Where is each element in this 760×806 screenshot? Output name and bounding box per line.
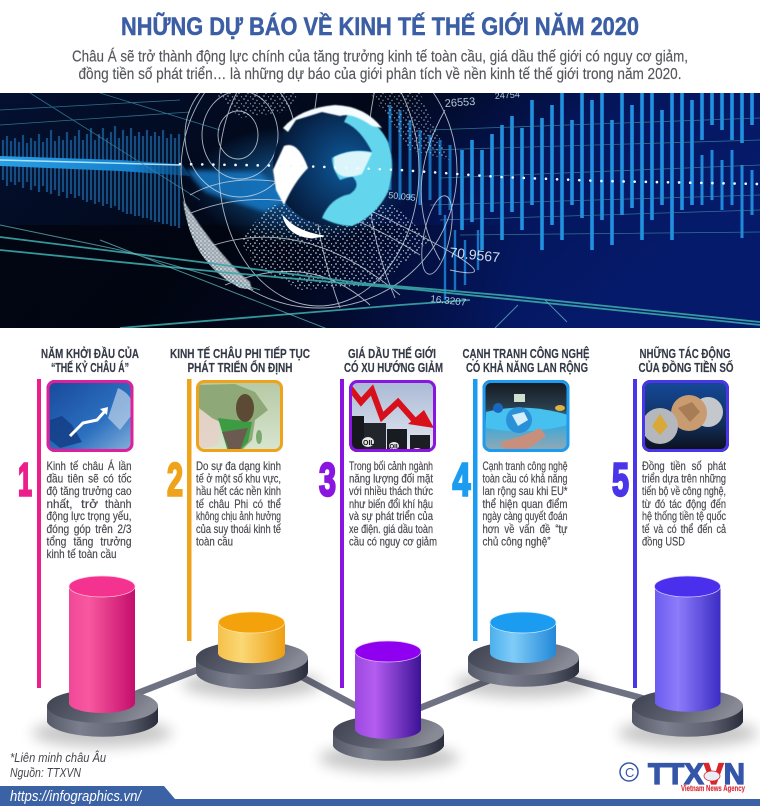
inner globe (273, 106, 393, 226)
body text 1: kinh tế toàn cầu (46, 547, 116, 561)
intro text: đồng tiền số phát triển… là những dự báo của giới phân tích về nền kinh tế thế giới trong năm 2020. (78, 66, 682, 83)
body text 2: Do sự đa dạng kinh (196, 459, 281, 473)
heading 1: “THẾ KỶ CHÂU Á” (51, 360, 129, 375)
hero image: digital globe and market data: 16.3207 (430, 294, 467, 309)
globe wireframe (180, 93, 475, 308)
body text 4: chủ công nghệ” (482, 534, 550, 548)
body text 3 (349, 459, 437, 548)
intro text (72, 48, 688, 83)
body text 3: xe điện. giá dầu toàn (349, 522, 433, 536)
heading 4 (462, 346, 590, 375)
logo: TTXVN: C (625, 765, 634, 780)
body text 5: hệ thống tiền tệ quốc (642, 509, 726, 523)
body text 5: triển dựa trên những (642, 472, 726, 486)
heading 1: NĂM KHỞI ĐẦU CỦA (41, 346, 139, 361)
title: NHỮNG DỰ BÁO VỀ KINH TẾ THẾ GIỚI NĂM 2020 (121, 11, 639, 41)
vertical rule 4 (473, 379, 478, 641)
number 3: 3 (319, 454, 336, 506)
body text 4: lan rộng sau khi EU* (482, 484, 568, 498)
body text 5: tiến bộ về công nghệ, (642, 484, 726, 498)
heading 4: CẠNH TRANH CÔNG NGHỆ (462, 346, 590, 361)
body text 5: đồng USD (642, 534, 685, 548)
column 3: oil (319, 346, 443, 688)
body text 1: Kinh tế châu Á lần (46, 458, 132, 473)
vertical rule 1 (37, 379, 41, 688)
connector bars (125, 663, 660, 716)
heading 3 (344, 346, 443, 375)
body text 2: tế ở một số khu vực, (196, 472, 281, 486)
body text 2 (196, 459, 281, 548)
hero image: digital globe and market data: 24754 (494, 89, 520, 101)
footer bar (0, 786, 760, 806)
number 4: 4 (452, 454, 471, 506)
body text 3: như biến đổi khí hậu (349, 497, 433, 511)
heading 1 (41, 346, 139, 375)
body text 4 (482, 459, 568, 548)
number 1: 1 (18, 454, 32, 506)
body text 1: tổng tăng trưởng (46, 534, 132, 548)
body text 4: toàn cầu có khả năng (482, 472, 568, 486)
body text 1: trở (81, 497, 98, 511)
body text 5: Đồng tiền số phát (642, 459, 727, 473)
body text 4: Cạnh tranh công nghệ (482, 459, 568, 473)
body text 1: thành (105, 497, 132, 511)
hero image: digital globe and market data (0, 93, 760, 328)
heading 5: NHỮNG TÁC ĐỘNG (640, 346, 730, 361)
heading 5 (638, 346, 734, 375)
hero image: digital globe and market data: 50.095 (388, 190, 416, 203)
heading 3: GIÁ DẦU THẾ GIỚI (348, 346, 436, 361)
body text 3: cầu có nguy cơ giảm (349, 534, 437, 548)
body text 3: và sự phát triển của (349, 509, 433, 523)
number 2: 2 (167, 454, 183, 506)
dotted data line (180, 164, 760, 184)
heading 5: CỦA ĐỒNG TIỀN SỐ (638, 360, 734, 375)
body text 2: không chịu ảnh hưởng (196, 509, 281, 523)
body text 1 (46, 458, 132, 561)
hero image: digital globe and market data: 70.9567 (449, 244, 501, 265)
body text 2: toàn cầu (196, 534, 233, 548)
3D cylinder 5 (618, 576, 758, 747)
3D cylinder 3 (319, 641, 459, 772)
vertical rule 3 (340, 379, 344, 688)
photo: Asia map with rising arrow (46, 380, 134, 452)
body text 5: tế và có thể đến cả (642, 522, 726, 536)
body text 1: đóng góp trên 2/3 (46, 522, 132, 536)
vertical rule 2 (187, 379, 192, 641)
hero image: digital globe and market data: 26553 (444, 96, 476, 110)
footnote and source: Nguồn: TTXVN (10, 765, 81, 780)
body text 2: hầu hết các nền kinh (196, 484, 281, 498)
body text 4: thể hiện quan điểm (482, 497, 568, 511)
body text 1: động lực trọng yếu, (46, 509, 132, 523)
photo: falling oil price and barrels (349, 380, 436, 454)
heading 3: CÓ XU HƯỚNG GIẢM (344, 360, 443, 375)
heading 4: CÓ KHẢ NĂNG LAN RỘNG (466, 360, 588, 375)
photo: falling oil price and barrels: OIL (390, 444, 400, 450)
column 5: digital currency (612, 346, 734, 688)
photo: falling oil price and barrels: OIL (363, 440, 375, 447)
3D cylinder 4 (454, 612, 594, 698)
body text 1: nhất, (46, 497, 72, 511)
body text 2: của suy thoái kinh tế (196, 522, 281, 536)
body text 3: năng lượng đối mặt (349, 472, 434, 486)
footnote and source (10, 750, 106, 780)
vertical rule 5 (633, 379, 637, 688)
footer url: https://infographics.vn/ (10, 788, 143, 805)
footnote and source: *Liên minh châu Âu (10, 750, 106, 765)
3D cylinder 2 (182, 612, 322, 698)
body text 5 (642, 459, 727, 548)
body text 5: từ đó tác động đến (642, 497, 726, 511)
body text 3: với nhiều thách thức (349, 484, 433, 498)
column 1: Asian century (18, 346, 139, 688)
photo: crypto coins (642, 380, 729, 452)
column 2: Africa (167, 346, 310, 641)
body text 4: ngày càng quyết đoán (482, 509, 568, 523)
globe dots (240, 205, 430, 290)
body text 3: Trong bối cảnh ngành (349, 459, 433, 473)
heading 2 (170, 346, 310, 375)
photo: Africa map with palm fruit (196, 380, 283, 452)
body text 1: độ tăng trưởng cao (46, 484, 132, 498)
body text 2: tế châu Phi có thể (196, 497, 281, 511)
logo: TTXVN: TTXVN (648, 758, 745, 791)
column 4: technology (452, 346, 590, 641)
body text 4: hơn về vấn đề “tự (482, 522, 568, 536)
heading 2: KINH TẾ CHÂU PHI TIẾP TỤC (170, 346, 310, 361)
3D cylinder 1 (32, 576, 172, 747)
body text 1: đầu tiên sẽ có tốc (46, 472, 132, 486)
photo: hand holding digital globe (482, 380, 570, 452)
heading 2: PHÁT TRIỂN ỔN ĐỊNH (188, 360, 292, 375)
number 5: 5 (612, 454, 629, 506)
